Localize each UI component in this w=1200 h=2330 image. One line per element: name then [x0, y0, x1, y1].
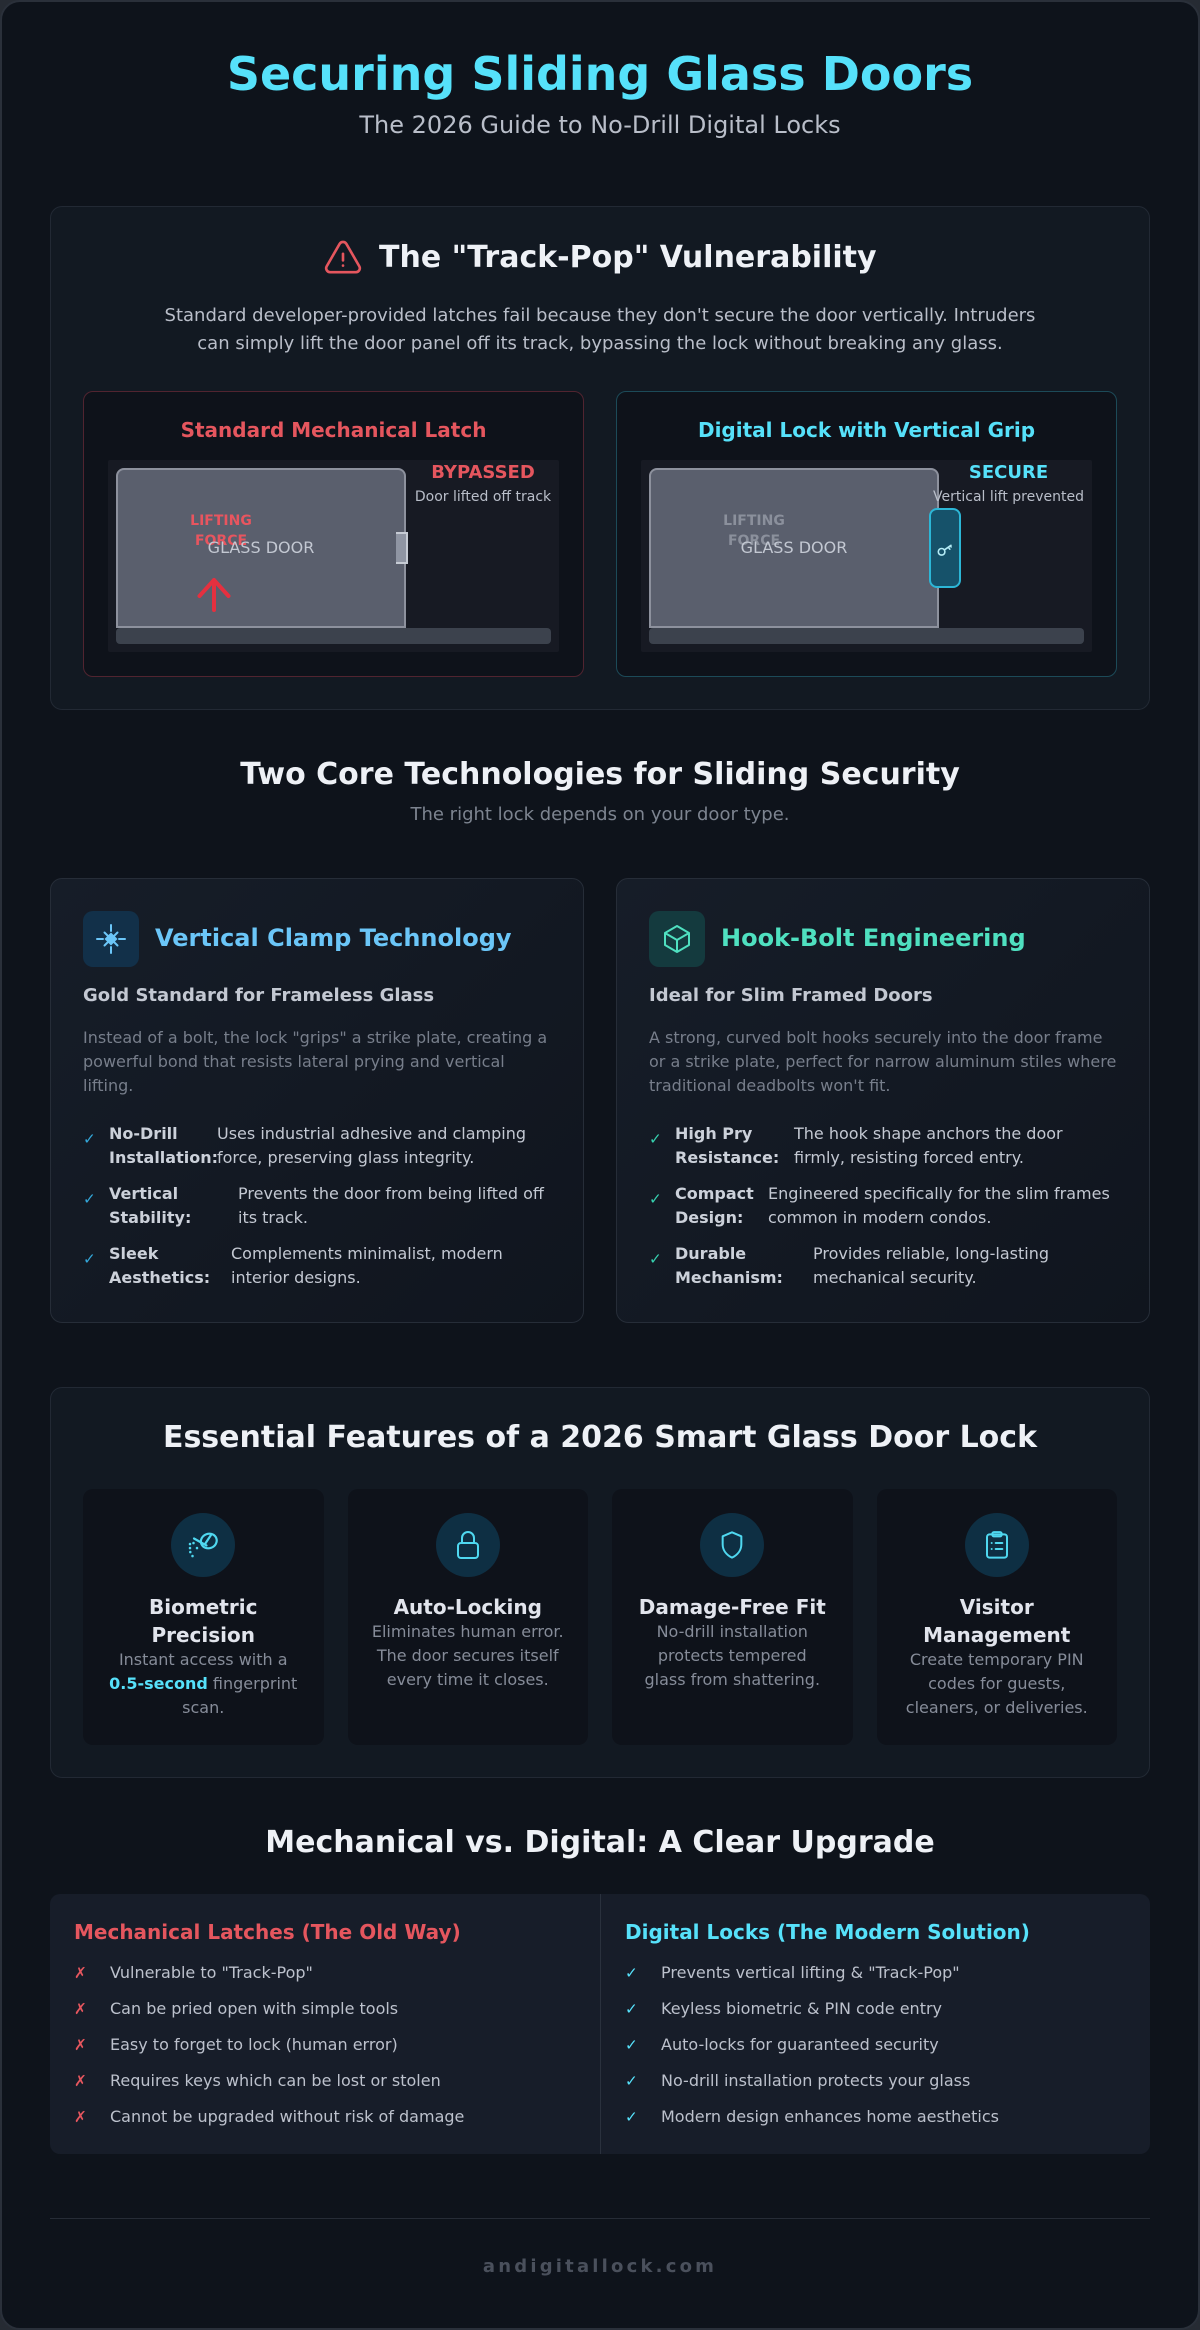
benefit: no-drill: ✓ [83, 1130, 96, 1148]
benefit: vertical stability: ✓ [83, 1190, 96, 1208]
text: hook-bolt description [649, 1028, 1116, 1095]
benefit: vertical stability: its track. [238, 1208, 308, 1227]
benefit: sleek aesthetics: ✓ [83, 1250, 96, 1268]
panel: essential features [50, 1387, 1150, 1778]
title: auto-locking: Auto-Locking [394, 1595, 542, 1619]
heading: two core technologies: Two Core Technologies for Sliding Security [240, 757, 960, 792]
list: digital pros: Prevents vertical lifting & "Track-Pop" [661, 1963, 960, 1982]
text: biometric precision [109, 1650, 297, 1717]
title: biometric precision: Precision [151, 1623, 255, 1647]
benefit: no-drill: No-Drill [109, 1124, 178, 1143]
footer: website: andigitallock.com [483, 2256, 717, 2277]
subtitle: The 2026 Guide to No-Drill Digital Locks [359, 111, 841, 139]
list: mechanical cons [74, 1963, 464, 2126]
benefit: high pry: High Pry [675, 1124, 752, 1143]
list: mechanical cons: ✗ [74, 2036, 87, 2054]
text: clamp description [83, 1028, 547, 1095]
icon: key [938, 544, 952, 556]
benefit: durable mechanism: Mechanism: [675, 1268, 783, 1287]
icon: warning triangle [324, 240, 362, 274]
subheading: frameless glass: Gold Standard for Frameless Glass [83, 985, 434, 1006]
list: digital pros: ✓ [625, 2072, 638, 2090]
list: digital pros [625, 1963, 999, 2126]
column heading: digital: Digital Locks (The Modern Solution) [625, 1920, 1030, 1944]
panel: digital lock [616, 391, 1117, 677]
subheading: door type: The right lock depends on your door type. [410, 804, 790, 825]
feature: auto-locking [348, 1489, 588, 1745]
list: mechanical cons: Can be pried open with simple tools [110, 1999, 398, 2018]
text: damage-free fit: No-drill installation [657, 1622, 808, 1641]
benefit: compact design: Design: [675, 1208, 743, 1227]
feature: biometric precision [83, 1489, 324, 1745]
heading: hook-bolt: Hook-Bolt Engineering [721, 924, 1026, 952]
list: digital pros: ✓ [625, 1964, 638, 1982]
diagram: latch background [108, 460, 559, 652]
footer rule [50, 2218, 1150, 2219]
benefit: vertical stability: Prevents the door from being lifted off [238, 1184, 544, 1203]
benefit: high pry: firmly, resisting forced entry. [794, 1148, 1024, 1167]
list: mechanical cons: ✗ [74, 2072, 87, 2090]
text: track-pop explanation: can simply lift the door panel off its track, bypassing the lock without breaking any glass. [197, 333, 1003, 354]
list: digital pros: No-drill installation protects your glass [661, 2071, 970, 2090]
benefit: compact design: ✓ [649, 1190, 662, 1208]
diagram: glass door right [649, 468, 939, 628]
diagram: lock background [641, 460, 1092, 652]
text: clamp description: powerful bond that resists lateral prying and vertical [83, 1052, 505, 1071]
divider [600, 1894, 601, 2154]
panel: vertical clamp [50, 878, 584, 1323]
label: lifting force: FORCE [195, 533, 247, 549]
benefit: high pry: The hook shape anchors the door [794, 1124, 1063, 1143]
list: clamp benefits [83, 1124, 544, 1287]
icon: fingerprint [171, 1513, 235, 1577]
diagram: digital lock body [929, 508, 961, 588]
icon: lift arrow [197, 578, 231, 612]
benefit: vertical stability: Stability: [109, 1208, 191, 1227]
benefit: high pry: ✓ [649, 1130, 662, 1148]
benefit: compact design [649, 1184, 1110, 1227]
list: digital pros: ✓ [625, 2036, 638, 2054]
list: mechanical cons: ✗ [74, 2108, 87, 2126]
heading: essential features: Essential Features of a 2026 Smart Glass Door Lock [163, 1420, 1037, 1455]
table: comparison [50, 1894, 1150, 2154]
benefit: high pry: Resistance: [675, 1148, 779, 1167]
icon: padlock [436, 1513, 500, 1577]
benefit: compact design: Engineered specifically for the slim frames [768, 1184, 1110, 1203]
text: track-pop explanation: Standard developer-provided latches fail because they don't secure the door vertically. Intruders [165, 305, 1035, 326]
benefit: sleek aesthetics: Aesthetics: [109, 1268, 210, 1287]
text: visitor management: cleaners, or deliveries. [906, 1698, 1088, 1717]
panel: track-pop vulnerability [50, 206, 1150, 710]
status: bypassed: BYPASSED [431, 462, 535, 483]
diagram: track right [649, 628, 1084, 644]
title: biometric precision [149, 1595, 257, 1647]
list: mechanical cons: Easy to forget to lock (human error) [110, 2035, 398, 2054]
list: digital pros: ✓ [625, 2000, 638, 2018]
list: hook-bolt benefits [649, 1124, 1110, 1287]
title: visitor management: Management [923, 1623, 1070, 1647]
benefit: durable mechanism: Durable [675, 1244, 746, 1263]
list: digital pros: ✓ [625, 2108, 638, 2126]
text: clamp description: lifting. [83, 1076, 133, 1095]
benefit: vertical stability [83, 1184, 544, 1227]
panel: standard mechanical latch [83, 391, 584, 677]
label: lifting force: LIFTING [190, 513, 252, 529]
benefit: vertical stability: Vertical [109, 1184, 178, 1203]
icon: clamp [83, 911, 139, 967]
text: auto-locking: every time it closes. [387, 1670, 549, 1689]
text: auto-locking: Eliminates human error. [372, 1622, 564, 1641]
text: damage-free fit: protects tempered [658, 1646, 807, 1665]
text: biometric precision: Instant access with a [119, 1650, 288, 1669]
text: biometric precision: scan. [182, 1698, 224, 1717]
title: biometric precision: Biometric [149, 1595, 257, 1619]
text: visitor management [906, 1650, 1088, 1717]
list: mechanical cons: ✗ [74, 2000, 87, 2018]
list: digital pros: Auto-locks for guaranteed security [661, 2035, 939, 2054]
benefit: sleek aesthetics: interior designs. [231, 1268, 361, 1287]
text: damage-free fit [644, 1622, 820, 1689]
list: digital pros: Modern design enhances home aesthetics [661, 2107, 999, 2126]
text: hook-bolt description: or a strike plate, perfect for narrow aluminum stiles where [649, 1052, 1116, 1071]
icon: clipboard [964, 1513, 1028, 1577]
text: track-pop explanation [165, 305, 1035, 354]
heading: track-pop: The "Track-Pop" Vulnerability [379, 240, 877, 275]
label: lifting force muted: LIFTING [723, 513, 785, 529]
benefit: no-drill: Uses industrial adhesive and clamping [217, 1124, 526, 1143]
text: hook-bolt description: A strong, curved bolt hooks securely into the door frame [649, 1028, 1102, 1047]
label: glass door: GLASS DOOR [741, 538, 847, 557]
heading: mechanical latch: Standard Mechanical Latch [181, 418, 486, 442]
text: clamp description: Instead of a bolt, the lock "grips" a strike plate, creating a [83, 1028, 547, 1047]
benefit: compact design: Compact [675, 1184, 754, 1203]
feature: visitor management [876, 1489, 1117, 1745]
benefit: durable mechanism: mechanical security. [813, 1268, 977, 1287]
subheading: slim framed: Ideal for Slim Framed Doors [649, 985, 933, 1006]
diagram: latch [396, 532, 408, 564]
icon: shield [700, 1513, 764, 1577]
benefit: no-drill: force, preserving glass integrity. [217, 1148, 474, 1167]
list: digital pros: Keyless biometric & PIN code entry [661, 1999, 942, 2018]
caption: door lifted: Door lifted off track [415, 489, 551, 505]
heading: digital lock: Digital Lock with Vertical Grip [698, 418, 1035, 442]
title: Securing Sliding Glass Doors [227, 47, 973, 101]
icon: cube [649, 911, 705, 967]
text: damage-free fit: glass from shattering. [644, 1670, 820, 1689]
caption: vertical lift prevented: Vertical lift prevented [933, 489, 1084, 505]
text: visitor management: Create temporary PIN [910, 1650, 1084, 1669]
label: lifting force muted [723, 513, 785, 549]
benefit: no-drill: Installation: [109, 1148, 218, 1167]
diagram: glass door left [116, 468, 406, 628]
list: mechanical cons: ✗ [74, 1964, 87, 1982]
benefit: durable mechanism [649, 1244, 1049, 1287]
label: lifting force [190, 513, 252, 549]
benefit: durable mechanism: Provides reliable, long-lasting [813, 1244, 1049, 1263]
text: hook-bolt description: traditional deadbolts won't fit. [649, 1076, 890, 1095]
benefit: sleek aesthetics: Complements minimalist, modern [231, 1244, 503, 1263]
title: visitor management: Visitor [960, 1595, 1034, 1619]
list: mechanical cons: Requires keys which can be lost or stolen [110, 2071, 441, 2090]
feature: damage-free fit [612, 1489, 852, 1745]
text: auto-locking: The door secures itself [377, 1646, 559, 1665]
benefit: no-drill [83, 1124, 526, 1167]
diagram: track left [116, 628, 551, 644]
text: biometric precision: 0.5-second fingerprint [109, 1674, 297, 1693]
label: lifting force muted: FORCE [728, 533, 780, 549]
heading: vertical clamp: Vertical Clamp Technology [155, 924, 512, 952]
title: damage-free fit: Damage-Free Fit [639, 1595, 826, 1619]
heading: mechanical vs digital: Mechanical vs. Digital: A Clear Upgrade [265, 1825, 935, 1860]
title: visitor management [923, 1595, 1070, 1647]
list: mechanical cons: Vulnerable to "Track-Pop" [110, 1963, 313, 1982]
list: mechanical cons: Cannot be upgraded without risk of damage [110, 2107, 464, 2126]
panel: hook-bolt [616, 878, 1150, 1323]
text: auto-locking [372, 1622, 564, 1689]
column heading: mechanical: Mechanical Latches (The Old Way) [74, 1920, 461, 1944]
benefit: sleek aesthetics: Sleek [109, 1244, 158, 1263]
benefit: durable mechanism: ✓ [649, 1250, 662, 1268]
label: glass door: GLASS DOOR [208, 538, 314, 557]
text: visitor management: codes for guests, [928, 1674, 1065, 1693]
benefit: sleek aesthetics [83, 1244, 503, 1287]
status: secure: SECURE [969, 462, 1048, 483]
benefit: compact design: common in modern condos. [768, 1208, 991, 1227]
benefit: high pry [649, 1124, 1063, 1167]
